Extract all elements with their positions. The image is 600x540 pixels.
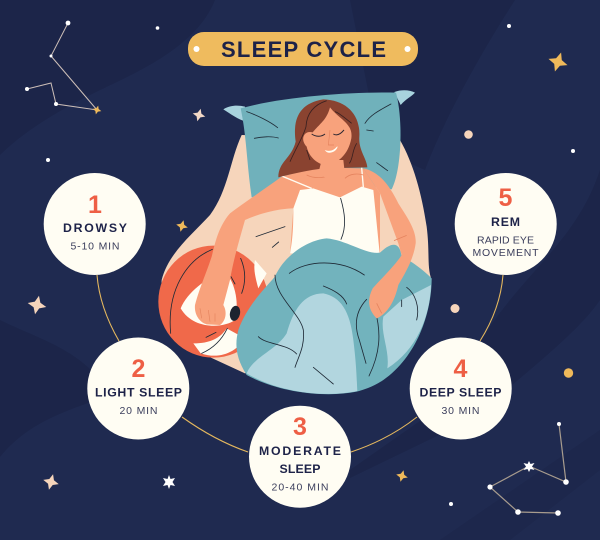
step 1: drowsy: 1 (88, 191, 102, 219)
constellation: bottom right (487, 422, 569, 516)
step 1: drowsy (44, 173, 146, 275)
step 4: deep sleep: 4 (454, 355, 468, 383)
title banner (188, 32, 418, 66)
step 2: light sleep: 20 MIN (120, 405, 158, 417)
body and left arm (195, 167, 380, 325)
constellation: top left (25, 21, 103, 116)
step 3: moderate sleep (249, 406, 351, 508)
step 3: moderate sleep: 3 (293, 413, 307, 441)
connecting arc (97, 275, 503, 452)
step 1: drowsy: DROWSY (63, 221, 127, 235)
step 5: REM: REM (491, 215, 520, 229)
step 2: light sleep (87, 338, 189, 440)
step 1: drowsy: 5-10 MIN (70, 240, 120, 252)
step 3: moderate sleep: MODERATE (259, 444, 341, 458)
step 5: REM (455, 173, 557, 275)
pillow (223, 90, 415, 197)
step 5: REM: RAPID EYE (477, 234, 534, 246)
plush cushion (158, 246, 268, 358)
step 3: moderate sleep: 20-40 MIN (272, 482, 328, 494)
step 4: deep sleep: 30 MIN (442, 405, 480, 417)
step 4: deep sleep (410, 338, 512, 440)
step 4: deep sleep: DEEP SLEEP (420, 386, 502, 400)
right arm and hand (363, 168, 416, 318)
step 5: REM: MOVEMENT (472, 247, 539, 259)
step 2: light sleep: 2 (132, 355, 145, 383)
step 2: light sleep: LIGHT SLEEP (95, 386, 182, 400)
step 3: moderate sleep: SLEEP (280, 462, 320, 476)
title banner: SLEEP CYCLE (221, 37, 386, 62)
head and hair (278, 99, 367, 179)
bed sheet (162, 135, 432, 373)
blanket (236, 238, 432, 394)
step 5: REM: 5 (499, 184, 513, 212)
illustration: sleeping woman (158, 90, 432, 394)
